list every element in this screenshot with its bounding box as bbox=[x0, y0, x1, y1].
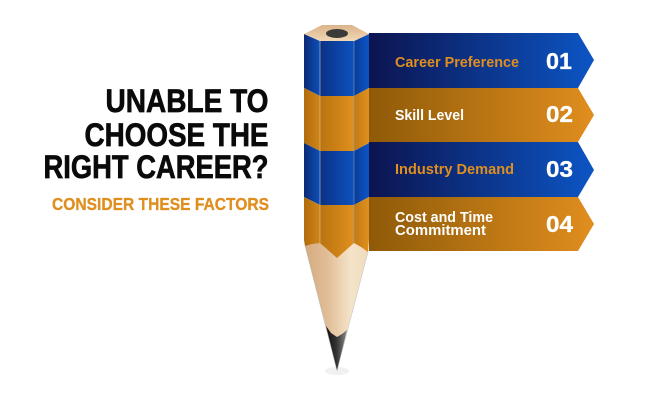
ribbon 04: Commitment bbox=[395, 223, 486, 239]
title: RIGHT CAREER? bbox=[44, 149, 268, 185]
top hexagon bbox=[304, 25, 369, 41]
ribbon 02: Skill Level bbox=[395, 108, 464, 124]
ribbon 01 bbox=[369, 33, 594, 88]
title bbox=[44, 83, 268, 185]
band: blue 3 bbox=[304, 143, 369, 205]
ribbon 01: Career Preference bbox=[395, 55, 519, 71]
title: UNABLE TO bbox=[106, 83, 268, 119]
ribbon 03: Industry Demand bbox=[395, 162, 514, 178]
graphite lead bbox=[326, 326, 347, 370]
band: blue 1 bbox=[304, 34, 369, 96]
band: orange 4 with zigzag edge bbox=[304, 197, 369, 258]
ribbon 03 bbox=[369, 142, 594, 197]
subtitle: CONSIDER THESE FACTORS bbox=[52, 194, 269, 214]
ribbon 02 bbox=[369, 88, 594, 142]
ribbon 04 bbox=[369, 197, 594, 251]
pencil bbox=[304, 25, 369, 375]
ribbon 04: 04 bbox=[546, 211, 573, 237]
facet highlights bbox=[320, 41, 354, 243]
ribbon 02: 02 bbox=[546, 101, 573, 127]
wood cone bbox=[305, 240, 368, 371]
ribbon 03: 03 bbox=[546, 156, 573, 182]
tip shadow bbox=[325, 367, 349, 375]
title: CHOOSE THE bbox=[84, 117, 268, 153]
top lead bbox=[326, 29, 348, 38]
ribbon 01: 01 bbox=[546, 48, 572, 74]
ribbon 04: Cost and Time bbox=[395, 210, 493, 226]
band: orange 2 bbox=[304, 88, 369, 151]
